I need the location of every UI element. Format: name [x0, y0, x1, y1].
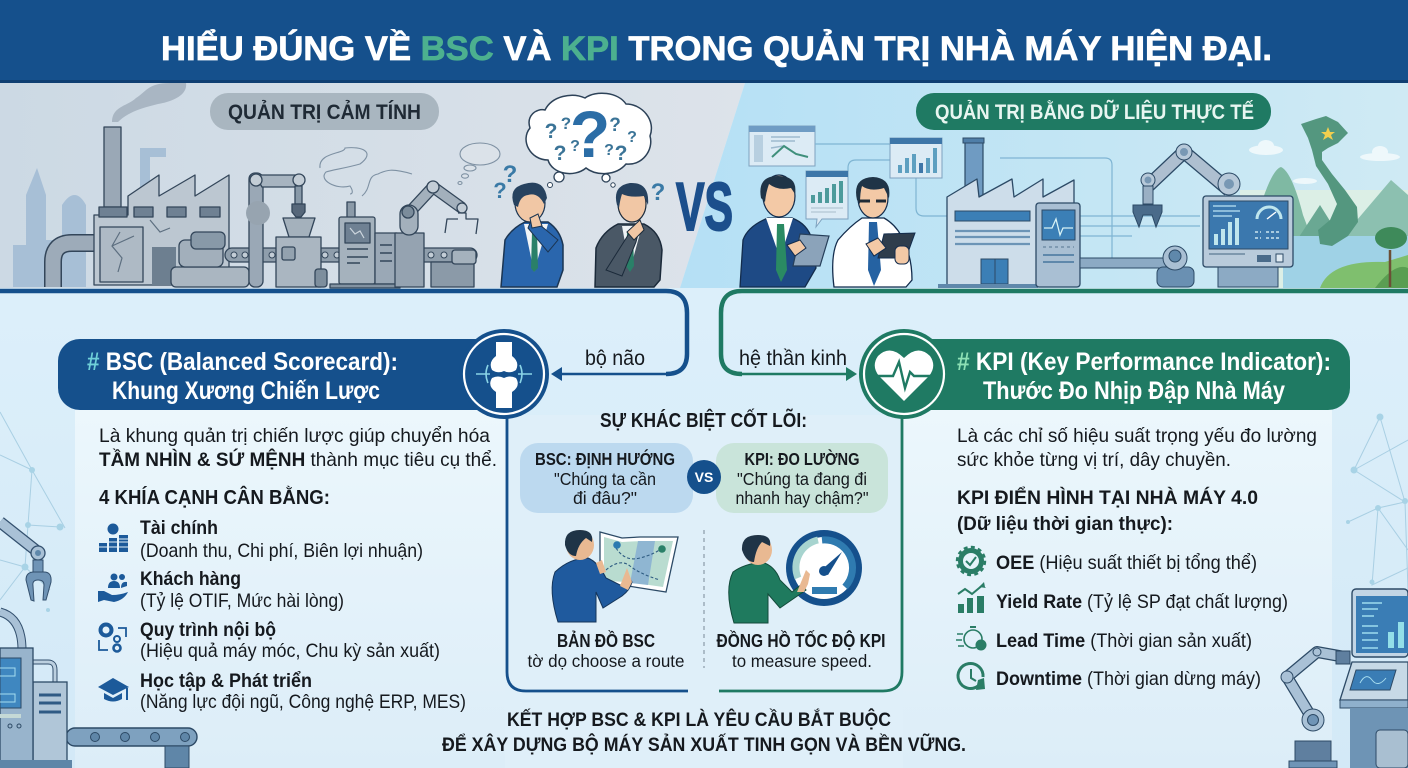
dashboard window: bar chart top [890, 138, 942, 178]
thought cloud with question marks: ? [570, 138, 580, 155]
manager with glasses and tablet [833, 177, 915, 287]
list item: downtime [958, 663, 1261, 690]
fumes and small thought bubble [320, 143, 500, 196]
icon: Vietnam map [1301, 116, 1358, 246]
side question marks [493, 161, 665, 206]
icon: heart pulse [859, 329, 949, 419]
label: nervous system: hệ thần kinh [739, 347, 847, 370]
icon: people on hand [98, 574, 128, 602]
panel: KPI heading [859, 329, 1350, 419]
label pill: intuition [210, 93, 439, 130]
caption: KPI speedometer: to measure speed. [732, 651, 872, 671]
card: KPI measure: "Chúng ta đang đi [737, 469, 867, 489]
stamping machine [171, 232, 249, 287]
pipe elbow inner [53, 243, 94, 287]
list item: lead time: Lead Time (Thời gian sản xuất) [996, 630, 1252, 652]
text block: KPI definition: sức khỏe từng vị trí, dây chuyền. [957, 449, 1231, 471]
illustration: right robot arm [1281, 648, 1350, 768]
connector: blue line to BSC [0, 291, 687, 381]
illustration: right monitor console [1340, 589, 1408, 768]
text block: KPI definition: Là các chỉ số hiệu suất trọng yếu đo lường [957, 425, 1317, 447]
factory chimney [104, 127, 121, 207]
heading: typical KPIs: (Dữ liệu thời gian thực): [957, 513, 1173, 535]
list: customers: Khách hàng [140, 568, 241, 590]
heading subtitle BSC: Khung Xương Chiến Lược [112, 377, 380, 405]
hopper machine [276, 218, 327, 287]
illustration: person with speed gauge [729, 530, 862, 623]
list item: OEE [957, 547, 1257, 575]
list: internal process: Quy trình nội bộ [140, 619, 276, 641]
list: learning and growth: Học tập & Phát triển [140, 670, 312, 692]
side question marks: ? [503, 161, 517, 188]
label pill: data-driven [916, 93, 1271, 130]
decoration: left network [0, 412, 65, 612]
list: finance: Tài chính [140, 517, 218, 539]
list: finance: (Doanh thu, Chi phí, Biên lợi nhuận) [140, 540, 423, 562]
text panel backgrounds [75, 410, 1332, 768]
illustration: left machine and conveyor [0, 612, 197, 768]
label: brain: bộ não [585, 347, 645, 370]
caption: BSC map [528, 630, 684, 671]
control panel with pulse [1036, 203, 1080, 287]
conveyor and robot base [1080, 246, 1194, 287]
VS badge: VS [676, 169, 733, 245]
pipe elbow [53, 243, 94, 287]
conveyor [225, 248, 477, 262]
manager with tablet [740, 175, 829, 287]
caption: BSC map: tờ dọ choose a route [528, 651, 684, 671]
list item: yield rate [958, 582, 1288, 613]
caption: BSC map: BẢN ĐỒ BSC [557, 630, 655, 651]
heading: typical KPIs: KPI ĐIỂN HÌNH TẠI NHÀ MÁY 4.0 [957, 486, 1258, 509]
robot arm 1 [246, 173, 305, 287]
robot arm data side [1133, 144, 1240, 227]
card: BSC direction [520, 443, 693, 513]
list: learning and growth: (Năng lực đội ngũ, Công nghệ ERP, MES) [140, 691, 466, 713]
list: learning and growth [98, 670, 466, 713]
thought cloud with question marks: ? [609, 115, 621, 136]
decoration: right network [1346, 414, 1408, 590]
card: BSC direction: BSC: ĐỊNH HƯỚNG [535, 448, 675, 469]
list item: downtime: Downtime (Thời gian dừng máy) [996, 668, 1261, 690]
confused manager in grey suit [595, 183, 662, 287]
smart factory [938, 138, 1074, 288]
side question marks: ? [651, 179, 665, 206]
text block: BSC definition [99, 425, 497, 471]
panel: BSC heading [58, 329, 549, 419]
icon: gear check [957, 547, 985, 575]
conclusion: ĐỂ XÂY DỰNG BỘ MÁY SẢN XUẤT TINH GỌN VÀ BỀN VỮNG. [442, 732, 966, 756]
caption: KPI speedometer [716, 630, 886, 671]
thought cloud with question marks: ? [627, 129, 637, 146]
card: BSC direction: "Chúng ta cần [554, 469, 656, 489]
dashboard window: speech bubble bar chart [806, 171, 848, 227]
factory building [94, 175, 229, 285]
thought cloud with question marks: ? [561, 114, 571, 133]
title banner [0, 0, 1408, 83]
factory details [99, 207, 220, 285]
conclusion: KẾT HỢP BSC & KPI LÀ YÊU CẦU BẮT BUỘC [507, 707, 891, 731]
card: BSC direction: đi đâu?" [573, 488, 637, 508]
thought cloud with question marks: ? [554, 142, 566, 165]
label pill: data-driven: QUẢN TRỊ BẰNG DỮ LIỆU THỰC TẾ [935, 99, 1254, 124]
icon: graduation cap [98, 678, 129, 702]
icon: coins [99, 524, 128, 552]
icon: gears and arrows [99, 624, 126, 652]
text block: BSC definition: Là khung quản trị chiến lược giúp chuyển hóa [99, 425, 490, 447]
control machine [330, 202, 400, 288]
monitor with dashboard [1203, 196, 1293, 287]
heading text BSC: # BSC (Balanced Scorecard): [87, 348, 398, 376]
text block: BSC definition: TẦM NHÌN & SỨ MỆNH thành mục tiêu cụ thể. [99, 447, 497, 471]
VS circle [687, 460, 721, 494]
thought cloud with question marks [526, 93, 651, 188]
icon: rising bars [958, 582, 986, 613]
robot arm 2 [395, 181, 478, 287]
connector: green line to KPI [721, 291, 1408, 381]
list item: yield rate: Yield Rate (Tỷ lệ SP đạt chất lượng) [996, 591, 1288, 613]
list item: OEE: OEE (Hiệu suất thiết bị tổng thể) [996, 552, 1257, 574]
label pill: intuition: QUẢN TRỊ CẢM TÍNH [228, 99, 421, 124]
side question marks: ? [493, 178, 507, 203]
illustration: person reading map [552, 530, 678, 622]
icon: fast stopwatch [956, 626, 986, 650]
heading: typical KPIs [957, 486, 1258, 535]
list: customers [98, 568, 344, 612]
panel: hero left - intuition-based factory [0, 83, 745, 288]
thought cloud with question marks: ? [615, 142, 627, 165]
heading subtitle KPI: Thước Đo Nhịp Đập Nhà Máy [983, 377, 1285, 405]
text block: KPI definition [957, 425, 1317, 471]
conclusion [442, 707, 966, 756]
list: internal process [99, 619, 440, 662]
thought cloud with question marks: ? [545, 120, 557, 143]
data connector lines [815, 144, 1200, 260]
heading text KPI: # KPI (Key Performance Indicator): [957, 348, 1331, 376]
illustration: left robot arm [0, 522, 51, 601]
list: customers: (Tỷ lệ OTIF, Mức hài lòng) [140, 590, 344, 612]
list: finance [99, 517, 423, 562]
caption: KPI speedometer: ĐỒNG HỒ TỐC ĐỘ KPI [716, 630, 886, 651]
dashboard window: line chart [749, 126, 815, 166]
card: KPI measure: KPI: ĐO LƯỜNG [744, 448, 860, 469]
icon: knee joint [459, 329, 549, 419]
landscape [1240, 140, 1408, 288]
card: KPI measure: nhanh hay chậm?" [736, 488, 868, 508]
VS circle: VS [695, 469, 713, 485]
clouds [1249, 140, 1400, 184]
thought cloud with question marks: ? [570, 97, 610, 171]
heading: core difference: SỰ KHÁC BIỆT CỐT LÕI: [600, 408, 807, 432]
heading: four perspectives: 4 KHÍA CẠNH CÂN BẰNG: [99, 485, 330, 509]
icon: smoke [112, 83, 186, 122]
title: HIỂU ĐÚNG VỀ BSC VÀ KPI TRONG QUẢN TRỊ NHÀ MÁY HIỆN ĐẠI. [161, 30, 1272, 68]
panel: hero right - data-driven factory [680, 83, 1408, 288]
skyline [13, 148, 166, 287]
panel: central comparison frame [507, 408, 902, 691]
card: KPI measure [716, 443, 888, 513]
confused manager in blue suit [501, 183, 563, 287]
list: internal process: (Hiệu quả máy móc, Chu kỳ sản xuất) [140, 640, 440, 662]
thought cloud with question marks: ? [604, 142, 614, 159]
icon: clock [958, 663, 985, 690]
